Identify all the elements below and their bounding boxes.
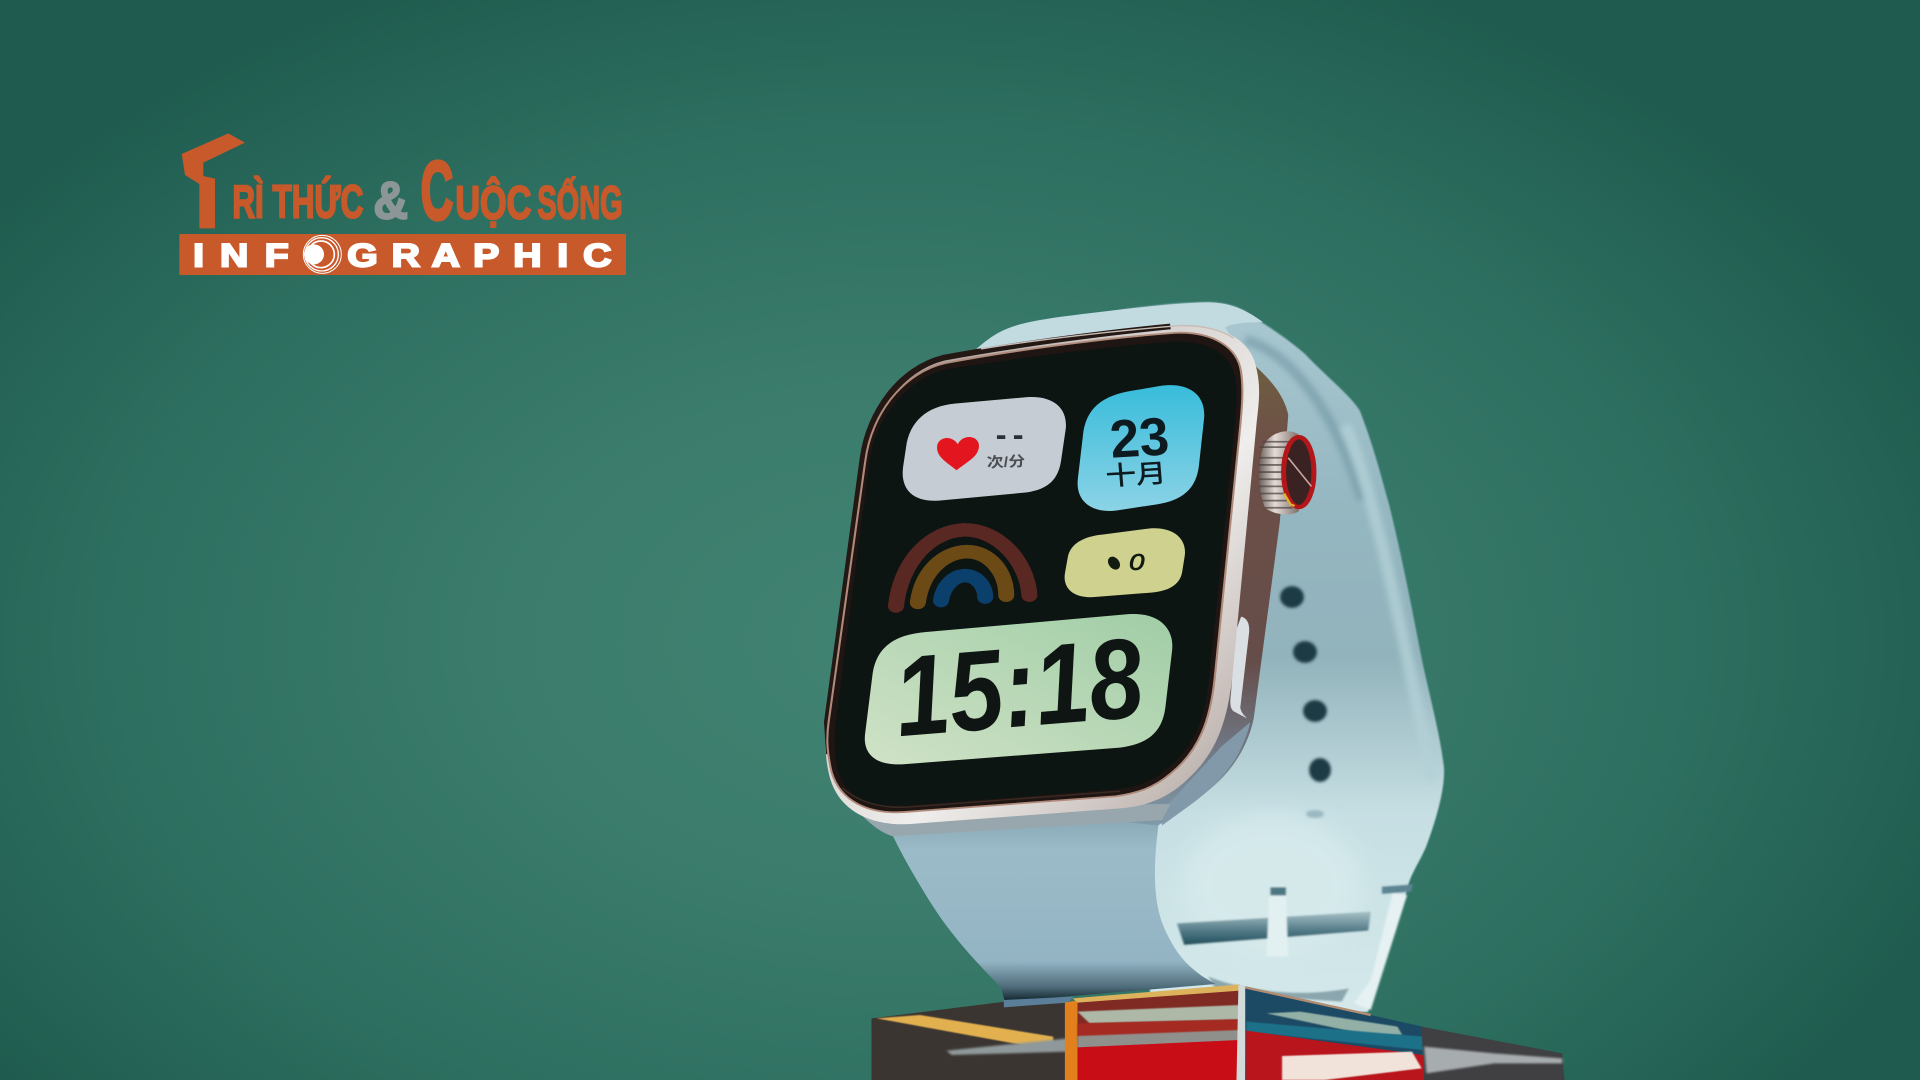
case dark top-left edge	[827, 326, 1170, 754]
strap side bar	[1382, 884, 1413, 894]
strap lower bright area	[1182, 815, 1362, 955]
prism white bar	[1282, 1052, 1422, 1080]
strap loop top	[1270, 887, 1286, 895]
watch	[826, 302, 1314, 836]
widget: date	[1078, 385, 1204, 511]
widget: steps	[1065, 528, 1185, 597]
case lower blue tone	[1162, 722, 1250, 826]
prism yellow edge	[1073, 984, 1240, 1003]
screen bottom reflection	[842, 788, 1120, 807]
strap inner edge shadow	[1245, 340, 1362, 500]
digital crown	[1259, 431, 1314, 514]
prism copper edge	[1245, 987, 1371, 1015]
logo banner text: Infographic: INF	[193, 237, 289, 274]
logo wordmark: Cuộc sống	[421, 144, 623, 237]
rainbow middle arc	[918, 552, 1006, 602]
side button	[1230, 617, 1249, 718]
crown knurled body	[1259, 431, 1299, 514]
prism gray band	[1078, 1030, 1240, 1048]
strap bottom shadow	[1208, 977, 1349, 1002]
prism orange strip	[1065, 1000, 1078, 1080]
widget: rainbow	[896, 530, 1029, 606]
rainbow inner arc	[941, 576, 985, 601]
strap holes	[1280, 586, 1331, 782]
prism red mid band	[1078, 1019, 1240, 1038]
logo wordmark: Cuộc sống: C	[421, 144, 453, 237]
acrylic prism stand	[872, 984, 1565, 1080]
prism pale band	[1078, 1005, 1240, 1023]
strap keeper and loops	[1177, 884, 1413, 1010]
prism right face	[1245, 987, 1423, 1080]
logo ampersand: &	[373, 172, 408, 231]
logo banner	[179, 234, 626, 275]
heart value: - -	[996, 423, 1023, 448]
date tile	[1078, 385, 1204, 511]
prism blue top edge	[1004, 997, 1074, 1007]
strap tiny lower hole	[1306, 810, 1324, 818]
clock tile	[865, 614, 1172, 764]
case underside	[855, 804, 1170, 836]
back strap	[1000, 302, 1444, 1012]
prism clear corner	[1236, 985, 1246, 1080]
prism bright red	[1078, 1040, 1240, 1080]
widget: heart rate	[903, 397, 1066, 501]
prism gray streak	[947, 1038, 1068, 1055]
prism yellow streak	[876, 1015, 1053, 1051]
screen glass	[835, 342, 1237, 806]
case inner copper rim	[827, 333, 1242, 812]
steps footprint	[1106, 555, 1122, 571]
logo: Tri thức & Cuộc sống Infographic	[179, 133, 626, 275]
crown red ring	[1284, 437, 1314, 507]
widget: clock	[865, 614, 1172, 764]
steps tile	[1065, 528, 1185, 597]
logo wordmark: Cuộc sống: UỘC	[455, 177, 531, 229]
prism teal band	[1246, 1022, 1423, 1050]
prism center face	[1078, 985, 1240, 1080]
prism far right face	[1422, 1027, 1565, 1080]
logo banner text: graphic: GRAPHIC	[347, 237, 612, 274]
rainbow outer arc	[896, 530, 1029, 606]
strap top lug	[973, 302, 1263, 361]
strap loop	[1267, 895, 1288, 957]
steps value: 0	[1129, 550, 1145, 576]
crown cap line	[1288, 458, 1311, 486]
strap outer lighter rim	[1345, 425, 1432, 780]
strap dark gap	[1177, 912, 1371, 945]
prism far right streak	[1424, 1047, 1562, 1073]
heart icon	[937, 437, 979, 470]
strap right loop	[1354, 893, 1407, 1010]
crown gold fleck	[1284, 493, 1295, 506]
prism red right	[1246, 1031, 1426, 1080]
logo: T house mark	[182, 133, 245, 228]
logo wordmark: Cuộc sống: SỐNG	[537, 177, 623, 229]
logo wordmark: Rì thức: RÌ THỨC	[232, 175, 363, 227]
date month: 十月	[1105, 459, 1167, 491]
front lower strap	[884, 800, 1216, 1002]
logo banner target icon	[303, 235, 341, 273]
prism pale reflection	[1267, 1012, 1402, 1035]
clock time: 15:18	[888, 615, 1149, 761]
case top silver line	[981, 326, 1234, 349]
prism left dark face	[872, 998, 1068, 1080]
heart rate tile	[903, 397, 1066, 501]
date number: 23	[1108, 407, 1171, 470]
crown ridges	[1259, 442, 1292, 508]
steel case	[826, 326, 1259, 824]
heart unit: 次/分	[986, 453, 1026, 471]
case side	[1095, 358, 1288, 826]
